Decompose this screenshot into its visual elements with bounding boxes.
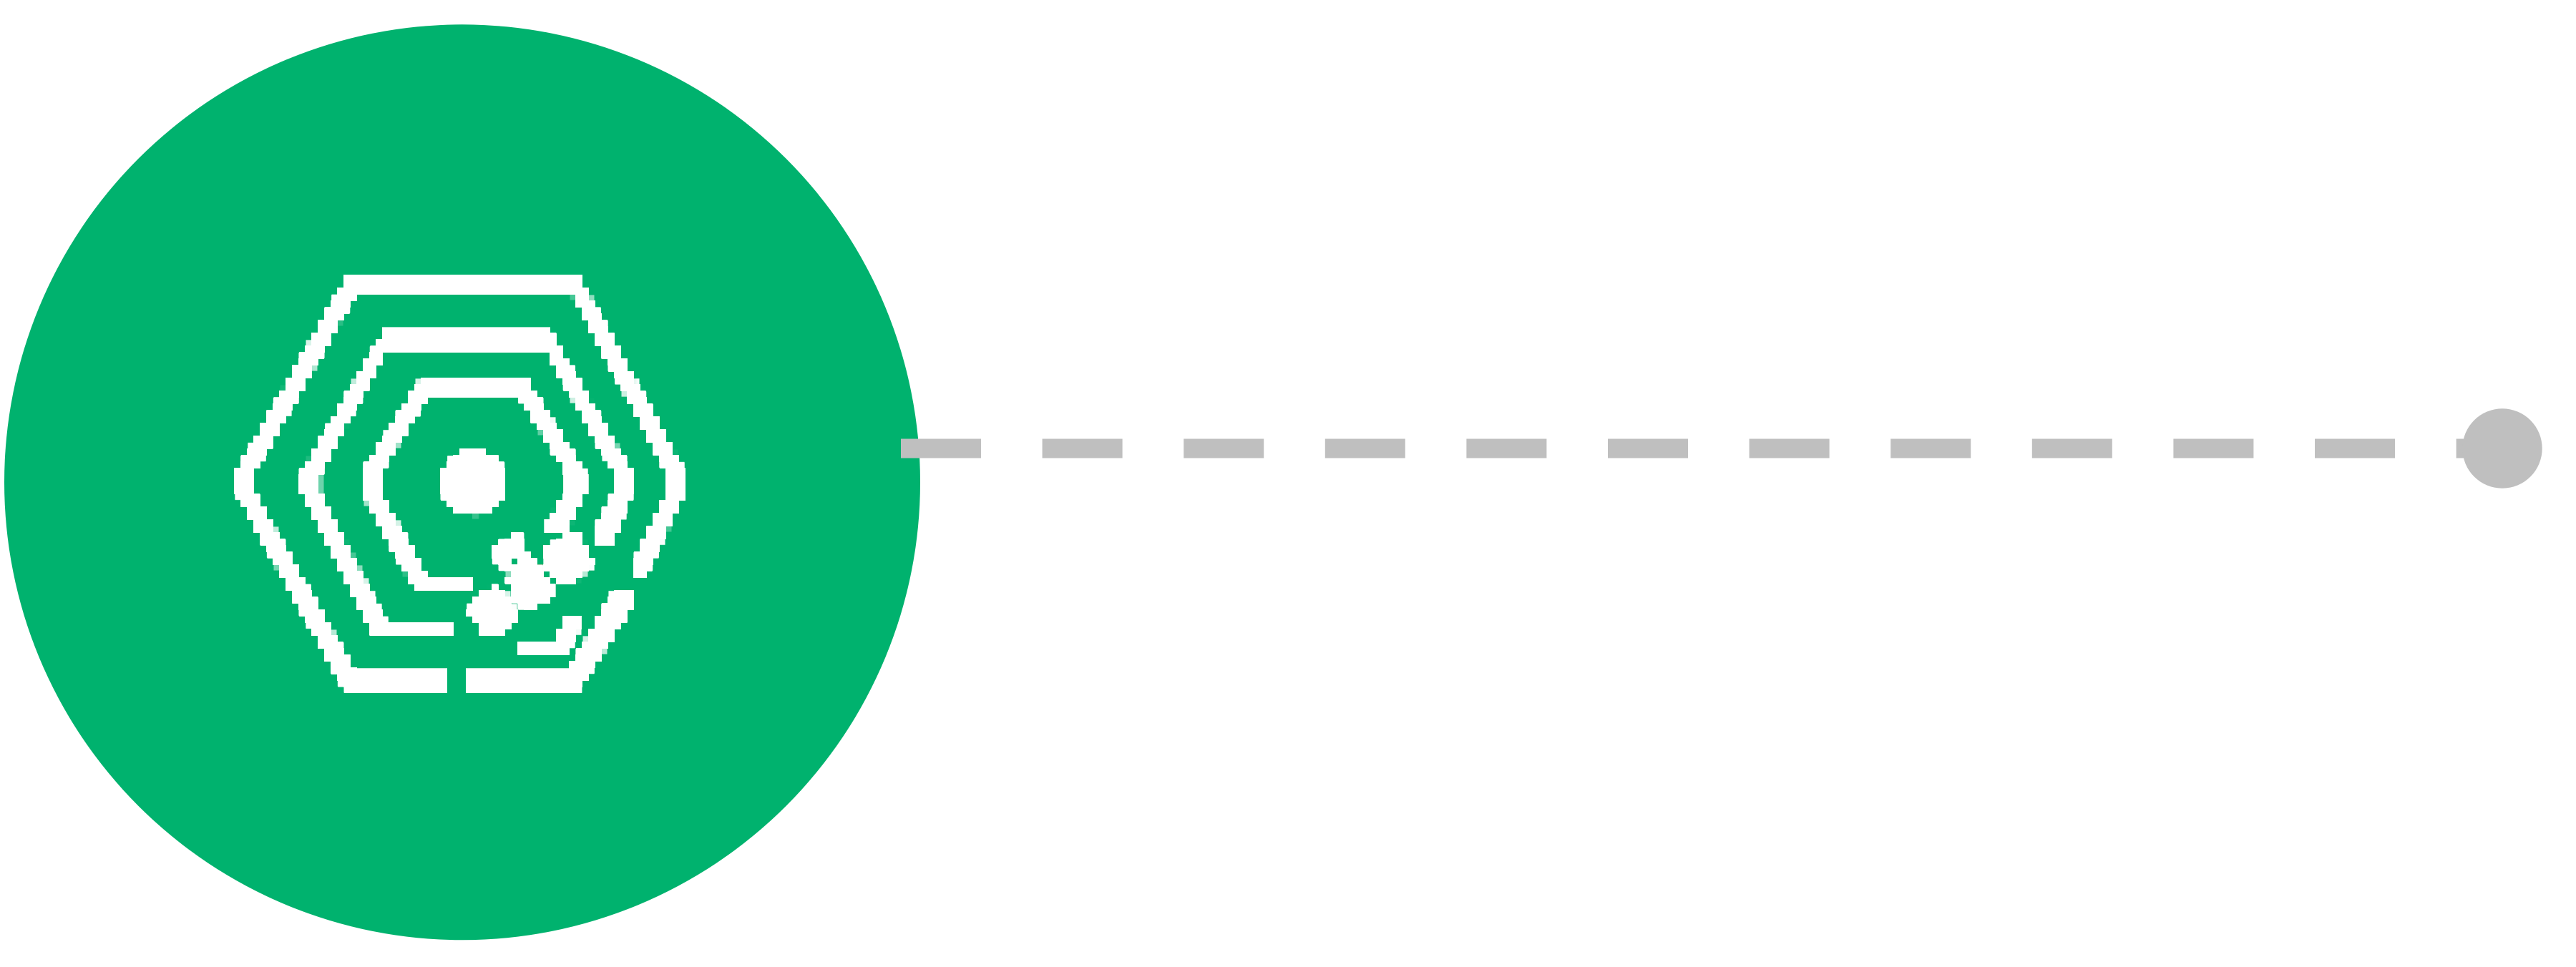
- dashed connector line: [901, 439, 2465, 458]
- middle gear: [507, 553, 553, 612]
- right gear notch: [540, 559, 546, 566]
- inner hexagon: [361, 378, 586, 589]
- central dot: [440, 449, 507, 516]
- upper left gear: [493, 533, 526, 572]
- icon: concentric hexagons with central dot and gears: [235, 275, 686, 690]
- green circle badge: [4, 24, 920, 940]
- outer hexagon, lower right stroke: [467, 589, 632, 690]
- gear cluster: [467, 533, 592, 639]
- middle hexagon, lower right stroke: [519, 617, 579, 657]
- left gear notch: [513, 559, 520, 566]
- middle hexagon, main stroke: [301, 330, 633, 637]
- outer hexagon, main stroke: [235, 275, 686, 690]
- grey end dot: [2462, 408, 2542, 489]
- lower gear: [467, 586, 519, 639]
- right gear: [540, 533, 592, 585]
